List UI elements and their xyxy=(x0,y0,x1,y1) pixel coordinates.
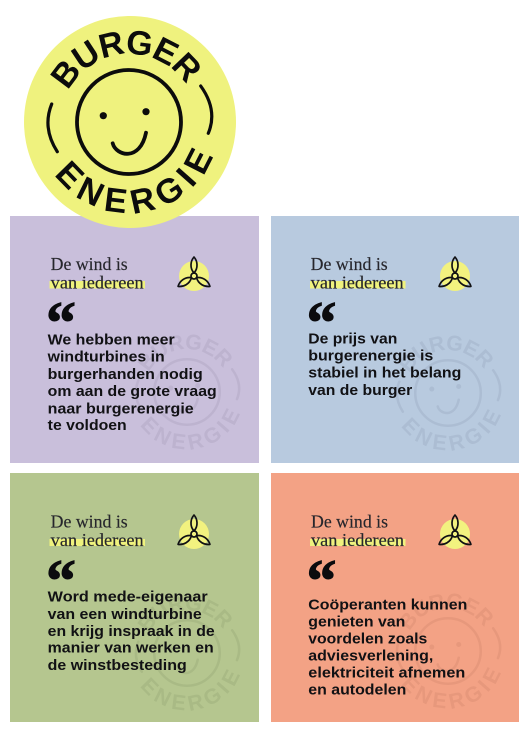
heading: De wind is van iedereen xyxy=(50,254,145,292)
heading: De wind is van iedereen: van iedereen xyxy=(311,530,404,550)
heading: De wind is van iedereen: De wind is xyxy=(311,254,388,274)
logo text: BURGER: BURGER xyxy=(50,30,200,89)
icon: quotation mark: “ xyxy=(306,290,336,356)
quote text: voordelen zoals xyxy=(308,630,427,647)
quote text: We hebben meer xyxy=(48,332,175,348)
watermark logo: BURGER xyxy=(399,594,492,630)
quote text: naar burgerenergie xyxy=(48,400,194,418)
quote text: burgerenergie is xyxy=(308,348,433,365)
quote text: de winstbesteding xyxy=(48,657,187,674)
quote text xyxy=(308,330,461,399)
icon: quotation mark: “ xyxy=(46,290,76,356)
watermark logo xyxy=(135,596,240,710)
icon: wind turbine xyxy=(176,257,212,291)
logo side arcs xyxy=(48,86,212,152)
logo text: ENERGIE: ENERGIE xyxy=(55,148,213,214)
panel: purple quote card xyxy=(10,216,259,463)
quote text xyxy=(48,589,215,674)
quote text: stabiel in het belang xyxy=(308,365,461,382)
icon: wind turbine xyxy=(176,515,212,549)
watermark logo: ENERGIE xyxy=(402,668,500,708)
quote text: van een windturbine xyxy=(48,606,202,623)
quote text: genieten van xyxy=(308,614,405,631)
quote text xyxy=(47,332,217,434)
heading: De wind is van iedereen: van iedereen xyxy=(311,272,404,292)
quote text: windturbines in xyxy=(47,349,165,366)
icon: smiley face xyxy=(77,70,181,174)
quote text: en krijg inspraak in de xyxy=(48,623,215,640)
heading: De wind is van iedereen xyxy=(310,254,406,292)
quote text: De prijs van xyxy=(308,330,397,347)
watermark logo xyxy=(134,334,240,450)
icon: wind turbine xyxy=(437,515,473,549)
quote text: adviesverlening, xyxy=(308,648,433,665)
watermark logo xyxy=(396,336,502,450)
heading: De wind is van iedereen: van iedereen xyxy=(51,530,144,550)
panel: green quote card xyxy=(10,473,259,722)
heading: De wind is van iedereen: van iedereen xyxy=(51,272,144,292)
heading: De wind is van iedereen: De wind is xyxy=(51,254,128,274)
quote text: van de burger xyxy=(308,382,412,399)
quote text: elektriciteit afnemen xyxy=(308,664,465,681)
watermark logo: BURGER xyxy=(138,334,232,370)
panel: salmon quote card xyxy=(271,473,519,722)
quote text: burgerhanden nodig xyxy=(48,366,203,383)
heading: De wind is van iedereen xyxy=(310,512,406,550)
watermark logo: BURGER xyxy=(399,336,492,372)
icon: quotation mark: “ xyxy=(306,548,336,614)
quote text xyxy=(308,596,467,699)
quote text: en autodelen xyxy=(308,682,406,699)
icon: wind turbine xyxy=(437,257,473,291)
heading: De wind is van iedereen xyxy=(50,512,145,550)
watermark logo: ENERGIE xyxy=(140,408,240,450)
heading: De wind is van iedereen: De wind is xyxy=(311,512,388,532)
quote text: om aan de grote vraag xyxy=(48,383,217,400)
watermark logo xyxy=(396,594,502,708)
watermark logo: ENERGIE xyxy=(402,410,500,450)
icon: quotation mark: “ xyxy=(46,548,76,614)
quote text: manier van werken en xyxy=(48,640,214,657)
heading: De wind is van iedereen: De wind is xyxy=(51,512,128,532)
watermark logo: BURGER xyxy=(138,596,232,632)
panel: blue quote card xyxy=(271,216,519,463)
quote text: Coöperanten kunnen xyxy=(308,596,467,613)
quote text: Word mede-eigenaar xyxy=(48,589,208,606)
logo: Burger Energie smiley badge xyxy=(24,16,236,228)
quote text: te voldoen xyxy=(48,417,127,434)
watermark logo: ENERGIE xyxy=(140,670,240,710)
